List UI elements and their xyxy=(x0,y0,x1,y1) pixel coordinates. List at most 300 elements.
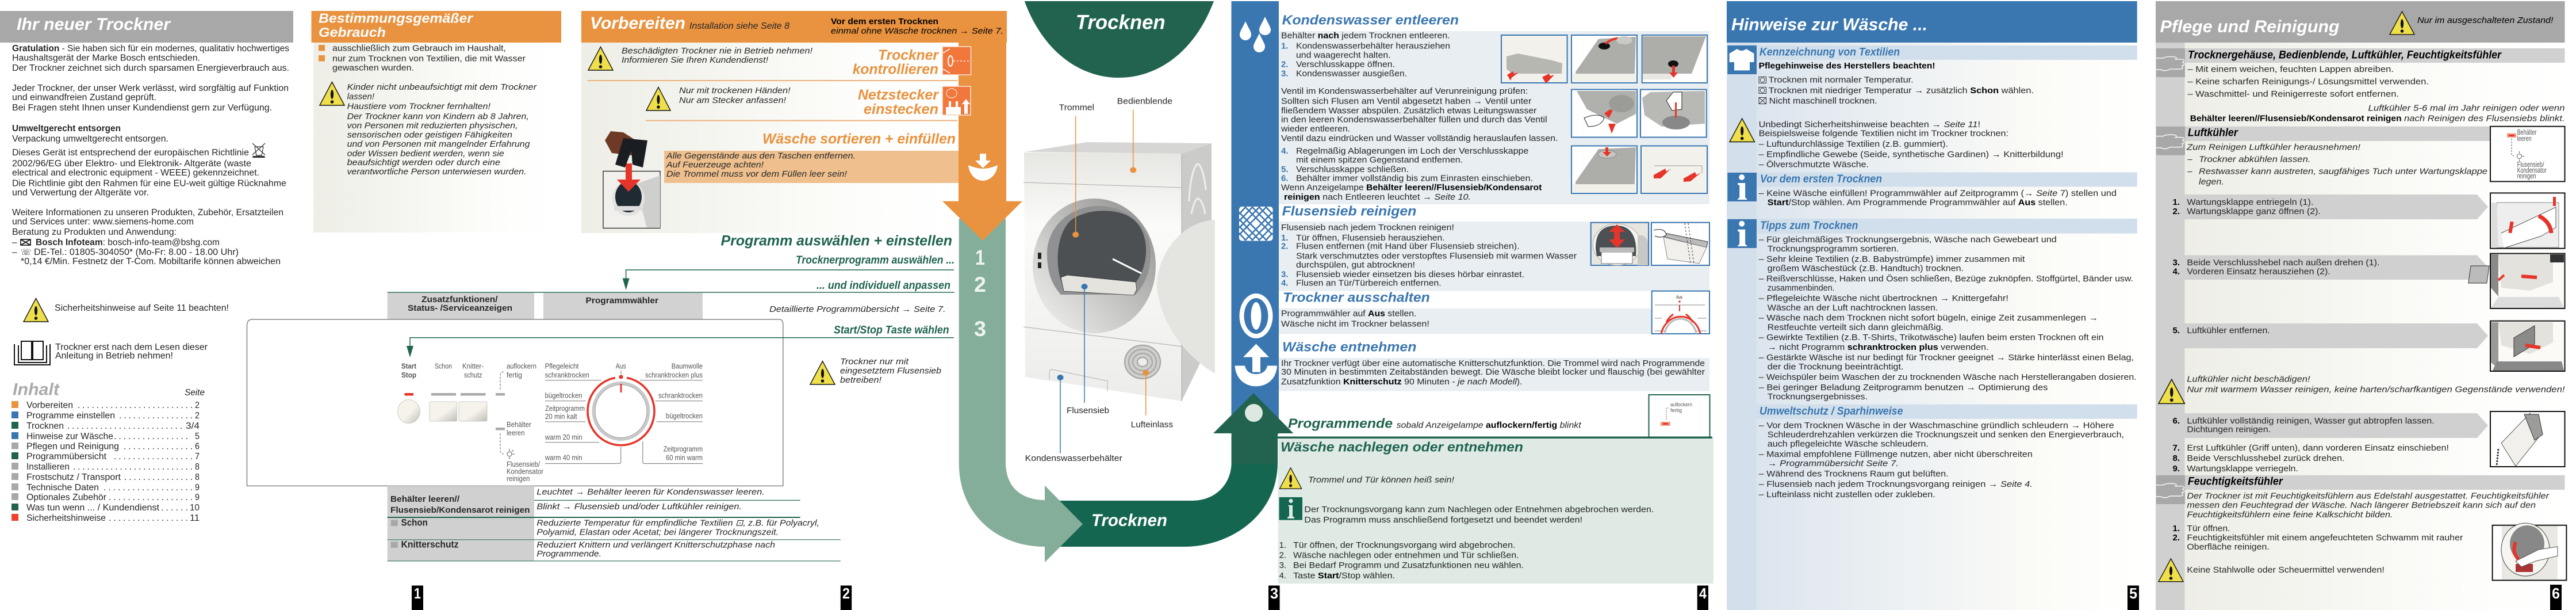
warning: unsuitable textiles: Beispielsweise folgende Textilien nicht im Trockner trocknen: xyxy=(1759,129,2008,139)
bullet list: ausschließlich zum Gebrauch im Haushalt, xyxy=(332,44,506,54)
icon: unload laundry xyxy=(1235,344,1277,386)
dial labels: Zeitprogramm xyxy=(664,445,703,453)
function table: Leuchtet → Behälter leeren für Kondenswasser leeren. xyxy=(536,487,765,497)
warning hot drum xyxy=(1279,468,1455,489)
warning: lint filter: betreiben! xyxy=(840,375,882,385)
function labels: Behälter xyxy=(507,421,531,429)
steps: und waagerecht halten. xyxy=(1296,51,1391,60)
panel: Vorbereiten xyxy=(581,11,1007,233)
warning: damaged dryer xyxy=(588,46,813,70)
note: first drying: einmal ohne Wäsche trocknen → Seite 7. xyxy=(831,26,1003,36)
section: Tipps zum Trocknen: – Gestärkte Wäsche ist nur bedingt für Trockner geeignet → Stärke hinterlässt einen Belag, xyxy=(1759,353,2134,363)
step bar 1-2: Wartungsklappe ganz öffnen (2). xyxy=(2187,207,2321,216)
step bar 1-2: 1. xyxy=(2172,197,2180,207)
section: Vor dem ersten Trocknen: – Keine Wäsche einfüllen! Programmwähler auf Zeitprogramm (→ Seite 7) stellen und xyxy=(1759,188,2117,198)
warning: unsuitable textiles: Unbedingt Sicherheitshinweise beachten → Seite 11 ! xyxy=(1759,120,1980,129)
heading: Trocknen top: Trocknen xyxy=(1076,12,1166,34)
warning text: Der Trockner kann von Kindern ab 8 Jahren, xyxy=(347,112,529,121)
table of contents: Frostschutz / Transport xyxy=(26,472,121,482)
steps: Verschlusskappe schließen. xyxy=(1296,165,1409,174)
sub heading: Installation siehe Seite 8 xyxy=(689,21,789,31)
heading band xyxy=(581,11,1007,43)
table of contents: . . . . . . . . . . . . . . . . xyxy=(114,432,188,441)
step bar 3-4 xyxy=(2156,256,2488,280)
callouts: Kondenswasserbehälter xyxy=(1025,453,1122,463)
warning: do not damage: Nur mit warmem Wasser reinigen, keine harten/scharfkantigen Gegenstände verwenden! xyxy=(2187,384,2565,395)
step bar 1-2 xyxy=(2156,195,2488,219)
table of contents: . . . . . . . . . . . . . . . . . . . . . . . . . . xyxy=(73,462,193,472)
care symbols xyxy=(1759,77,1766,104)
section: Tipps zum Trocknen: zusammenbinden. xyxy=(1768,283,1834,293)
text block: contact: *0,14 €/Min. Festnetz der T-Com. Mobiltarife können abweichen xyxy=(21,257,281,266)
section: Tipps zum Trocknen: → nicht Programm schranktrocken plus verwenden. xyxy=(1768,342,1989,352)
steps: 1. xyxy=(1281,41,1289,51)
text block: Umweltgerecht entsorgen: und Verwertung der Altgeräte vor. xyxy=(12,188,149,197)
illustration: service flap 1 xyxy=(2468,253,2564,308)
air vent xyxy=(1125,345,1160,379)
table of contents: . . . . . . . . . . . . . . . . xyxy=(119,411,193,421)
section: Luftkühler: – xyxy=(2187,155,2192,165)
column header: Zusatzfunktionen xyxy=(388,293,534,319)
steps xyxy=(1279,540,1524,581)
warning: lint filter xyxy=(810,357,941,385)
door xyxy=(1157,220,1215,373)
function table: Knitterschutz xyxy=(401,540,459,550)
warning: no steel wool: Keine Stahlwolle oder Scheuermittel verwenden! xyxy=(2187,565,2385,575)
page number 6 xyxy=(2550,585,2562,610)
section: Feuchtigkeitsfühler xyxy=(2156,475,2564,552)
icon: hand xyxy=(2156,475,2185,504)
steps: Behälter immer vollständig bis zum Einrasten einschieben. xyxy=(1296,174,1533,184)
text block: contact: und Services unter: www.siemens-home.com xyxy=(12,217,194,227)
section: Vor dem ersten Trocknen xyxy=(1727,173,2137,208)
table of contents: Trocknen xyxy=(26,421,64,431)
page number 3 xyxy=(1268,585,1280,610)
function table: Programmende. xyxy=(536,549,601,559)
icon: load laundry xyxy=(968,154,998,181)
info note: Das Programm muss anschließend fortgesetzt und beendet werden! xyxy=(1304,515,1582,525)
steps: in den leeren Kondenswasserbehälter füllen und durch das Ventil xyxy=(1281,115,1547,125)
section: Tipps zum Trocknen: – Reißverschlüsse, Haken und Ösen schließen, Bezüge zuknöpfen. Stoffgürtel, Bänder usw. xyxy=(1759,273,2133,284)
function labels: Kondensator xyxy=(507,467,543,475)
text xyxy=(1281,309,1429,329)
note: first drying xyxy=(831,17,1003,36)
text: Zusatzfunktion Knitterschutz 90 Minuten - je nach Modell ). xyxy=(1281,377,1523,387)
steps: Wenn Anzeigelampe Behälter leeren//Flusensieb/Kondensarot xyxy=(1281,183,1542,193)
section: Feuchtigkeitsfühler: messen den Feuchtegrad der Wäsche. Nach längerer Betriebszeit kann sich auf den xyxy=(2187,501,2536,510)
table of contents: Vorbereiten xyxy=(26,401,73,410)
safety note: Sicherheitshinweise auf Seite 11 beachten! xyxy=(55,303,229,313)
panel background xyxy=(581,43,958,233)
steps: Regelmäßig Ablagerungen im Loch der Verschlusskappe xyxy=(1296,146,1528,156)
page number 4 xyxy=(1697,585,1708,610)
step bar 3-4: Beide Verschlusshebel nach außen drehen (1). xyxy=(2187,258,2379,268)
tank handle xyxy=(1049,369,1107,391)
steps: Flusen entfernen (mit Hand über Flusensieb streichen). xyxy=(1296,242,1519,251)
program end illustration: auflockern xyxy=(1670,402,1692,408)
table of contents: 9 xyxy=(195,493,200,502)
icon: switch off xyxy=(1240,293,1273,338)
table of contents: . . . . . . . . . . . . . . . . . . . xyxy=(103,483,193,493)
icon: water drops xyxy=(1240,17,1271,52)
section: Tipps zum Trocknen: – Bei geringer Beladung Zeitprogramm benutzen → Optimierung des xyxy=(1759,383,2048,392)
section: Tipps zum Trocknen: Restfeuchte verteilt sich dann gleichmäßig. xyxy=(1768,322,1943,332)
section: Luftkühler: – xyxy=(2187,167,2192,177)
column header: Programmwähler xyxy=(543,293,703,319)
heading: Bestimmungsgemäßer xyxy=(319,10,473,25)
section: Tipps zum Trocknen: – Für gleichmäßiges Trocknungsergebnis, Wäsche nach Gewebeart und xyxy=(1759,235,2057,245)
panel: Flusensieb reinigen xyxy=(1281,204,1709,288)
note box: pockets: Auf Feuerzeuge achten! xyxy=(666,160,764,170)
table of contents: 8 xyxy=(195,472,200,482)
note box: pockets: Alle Gegenstände aus den Taschen entfernen. xyxy=(666,151,856,161)
table of contents: . . . . . . . . . . . . . . . xyxy=(124,472,193,482)
warning: dry hands xyxy=(646,86,791,110)
illustration: dryer xyxy=(1023,97,1215,463)
text block: contact: DE-Tel.: 01805-304050* (Mo-Fr: 8.00 - 18.00 Uhr) xyxy=(34,247,239,257)
table of contents: . . . . . . . . . . . . . . . . . . xyxy=(109,493,193,502)
function labels: leeren xyxy=(507,429,525,437)
section: Umweltschutz: – Flusensieb nach jedem Trocknungsvorgang reinigen → Seite 4. xyxy=(1759,479,2033,489)
section: Luftkühler xyxy=(2156,127,2491,186)
text block: Umweltgerecht entsorgen: Umweltgerecht entsorgen xyxy=(12,124,121,134)
section: Feuchtigkeitsfühler: Der Trockner ist mit Feuchtigkeitsfühlern aus Edelstahl ausgestattet. Feuchtigkeitsfühler xyxy=(2187,491,2550,501)
step: Wäsche sortieren: Wäsche sortieren + einfüllen xyxy=(762,131,956,147)
table of contents: 5 xyxy=(195,432,200,441)
steps: fließendem Wasser abspülen. Zusätzlich etwas Leitungswasser xyxy=(1281,106,1536,116)
section: Feuchtigkeitsfühler: Feuchtigkeitsfühler mit einem angefeuchteten Schwamm mit rauher xyxy=(2187,533,2463,543)
heading: Gebrauch xyxy=(319,25,386,40)
dial labels: bügeltrocken xyxy=(545,392,582,400)
steps: Flusensieb nach jedem Trocknen reinigen! xyxy=(1281,223,1454,232)
icon: hand xyxy=(2156,48,2185,77)
text block: intro xyxy=(12,44,289,113)
section: Umweltschutz: Schleuderdrehzahlen verkürzen die Trocknungszeit und senken den Energieverbrauch, xyxy=(1768,430,2124,440)
section: Tipps zum Trocknen: der die Trocknung beeinträchtigt. xyxy=(1768,362,1903,372)
dryer front xyxy=(1024,152,1182,401)
illustration 7: push tank in xyxy=(1641,146,1707,193)
dashed connectors xyxy=(500,372,504,454)
steps: Bei Bedarf Programm und Zusatzfunktionen neu wählen. xyxy=(1293,561,1524,570)
section: Tipps zum Trocknen: – Gewirkte Textilien (z.B. T-Shirts, Trikotwäsche) laufen beim ersten Trocknen oft ein xyxy=(1759,333,2104,342)
text block: Umweltgerecht entsorgen: 2002/96/EG über Elektro- und Elektronik- Altgeräte (waste xyxy=(12,159,251,169)
dial labels: Pflegeleicht xyxy=(545,363,579,371)
function labels: fertig xyxy=(507,371,522,379)
title: Ihr neuer Trockner xyxy=(17,15,171,34)
heading band xyxy=(0,11,293,43)
page number 5 xyxy=(2128,585,2139,610)
warning text: beaufsichtigt werden oder durch eine xyxy=(347,158,500,167)
program end illustration: fertig xyxy=(1670,407,1682,414)
table of contents: Installieren xyxy=(26,462,70,472)
function table xyxy=(388,486,841,562)
program dial xyxy=(588,371,654,445)
steps: Kondenswasser ausgießen. xyxy=(1296,69,1407,78)
top rule xyxy=(1278,436,1712,439)
steps: Flusen an Tür/Türbereich entfernen. xyxy=(1296,279,1442,288)
warning: unsuitable textiles: – Ölverschmutzte Wäsche. xyxy=(1759,159,1869,170)
steps: Stark verschmutztes oder verstopftes Flusensieb mit warmen Wasser xyxy=(1296,251,1577,261)
steps: 3. xyxy=(1281,69,1289,78)
illustration 6: close cap xyxy=(1571,146,1637,193)
orange flow arrow xyxy=(942,42,1022,241)
panel background xyxy=(313,43,557,232)
step: Netzstecker einstecken xyxy=(858,87,939,117)
table of contents: 2 xyxy=(195,401,200,410)
heading band xyxy=(312,11,561,43)
label: Seite: Seite xyxy=(185,388,205,398)
steps 7-9 xyxy=(2172,443,2449,474)
step bar 3-4: 4. xyxy=(2172,267,2180,277)
steps: 6. xyxy=(1281,174,1289,184)
section: Feuchtigkeitsfühler: Oberfläche reinigen. xyxy=(2187,542,2270,552)
steps 7-9: 9. xyxy=(2172,464,2180,474)
warning: unsuitable textiles: – Empfindliche Gewebe (Seide, synthetische Gardinen) → Knitterbildung! xyxy=(1759,150,2064,159)
section: Luftkühler: Trockner abkühlen lassen. xyxy=(2199,155,2310,165)
steps: Sollten sich Flusen am Ventil abgesetzt haben → Ventil unter xyxy=(1281,97,1531,106)
function table: Polyamid, Elastan oder Acetat; bei längerer Trocknungszeit. xyxy=(536,528,779,537)
table of contents: 11 xyxy=(190,513,200,523)
table of contents: 7 xyxy=(195,452,200,462)
section: Umweltschutz: Umweltschutz / Sparhinweise xyxy=(1759,405,1903,417)
section: Umweltschutz: – Vor dem Trocknen Wäsche in der Waschmaschine gründlich schleudern → Höhere xyxy=(1759,421,2114,430)
section: Tipps zum Trocknen: Wäsche an der Luft nachtrocknen lassen. xyxy=(1768,303,1938,313)
step bar 6: Luftkühler vollständig reinigen, Wasser gut abtropfen lassen. xyxy=(2187,416,2435,426)
reading note: Anleitung in Betrieb nehmen! xyxy=(55,351,173,361)
text block: Umweltgerecht entsorgen: Die Richtlinie gibt den Rahmen für eine EU-weit gültige Rücknahme xyxy=(12,178,286,189)
buttons xyxy=(398,399,487,424)
callouts: Flusensieb xyxy=(1067,406,1109,415)
section: Tipps zum Trocknen: – Weichspüler beim Waschen der zu trocknenden Wäsche nach Herstellerangaben dosieren. xyxy=(1759,372,2137,382)
section: Umweltschutz: – Während des Trocknens Raum gut belüften. xyxy=(1759,469,1949,479)
steps: Flusensieb wieder einsetzen bis dieses hörbar einrastet. xyxy=(1296,270,1524,280)
function table: Flusensieb/Kondensarot reinigen xyxy=(390,505,530,515)
section: Gehäuse: – Keine scharfen Reinigungs-/ Lösungsmittel verwenden. xyxy=(2187,77,2429,87)
steps: 4. xyxy=(1279,571,1286,581)
text: Ihr Trockner verfügt über eine automatische Knitterschutzfunktion. Die Trommel wird nach Programmende xyxy=(1281,359,1705,368)
step numbers: 3 xyxy=(974,317,986,341)
icon: lint lamp xyxy=(507,449,515,459)
section: Gehäuse: Behälter leeren//Flusensieb/Kondensarot reinigen xyxy=(2190,114,2402,124)
section: Kennzeichnung xyxy=(1727,45,2137,106)
steps 7-9: 7. xyxy=(2172,443,2180,453)
warning text: und von Personen mit mangelnder Erfahrung xyxy=(347,139,530,149)
column header: Zusatzfunktionen: Zusatzfunktionen/ xyxy=(421,295,498,304)
warning: do not damage xyxy=(2159,374,2565,403)
icon: open book xyxy=(14,341,50,365)
heading: Programmende: Programmende xyxy=(1288,416,1393,431)
section: Tipps zum Trocknen: – Pflegeleichte Wäsche nicht übertrocknen → Knittergefahr! xyxy=(1759,293,2008,303)
note box: pockets: Die Trommel muss vor dem Füllen leer sein! xyxy=(666,169,848,179)
dial labels xyxy=(545,363,703,462)
warning text: von Personen mit reduzierten physischen, xyxy=(347,121,518,131)
arrow: start stop xyxy=(407,338,954,357)
blue side strip xyxy=(1232,1,1279,434)
column header: Programmwähler: Programmwähler xyxy=(585,296,658,306)
icon: hand xyxy=(2156,127,2185,155)
page number 5: 5 xyxy=(2129,585,2137,602)
table of contents: Pflegen und Reinigung xyxy=(26,442,119,451)
heading band xyxy=(2156,1,2564,43)
warning: dry hands: Nur mit trockenen Händen! xyxy=(679,86,791,96)
function table: Blinkt → Flusensieb und/oder Luftkühler reinigen. xyxy=(536,502,742,512)
step bar 3-4: Vorderen Einsatz herausziehen (2). xyxy=(2187,267,2330,277)
section: Umweltschutz: – Lufteinlass nicht zustellen oder zukleben. xyxy=(1759,490,1935,500)
text block: contact: – xyxy=(12,238,17,247)
icon: lint filter lattice xyxy=(1239,207,1273,241)
steps: Tür öffnen, Flusensieb herausziehen. xyxy=(1296,233,1445,243)
icon: t-shirt xyxy=(1730,49,1754,70)
text block: contact: – xyxy=(12,247,17,257)
indicator inset xyxy=(2490,127,2564,181)
steps 7-9: 8. xyxy=(2172,453,2180,463)
icon: warning triangle xyxy=(320,82,344,105)
callouts: Lufteinlass xyxy=(1131,420,1173,429)
steps: 2. xyxy=(1281,242,1289,251)
steps: 1. xyxy=(1281,233,1289,243)
section: Vor dem ersten Trocknen: Start/Stop wählen. Am Programmende Programmwähler auf Aus stellen. xyxy=(1768,198,2068,208)
step bar 6: 6. xyxy=(2172,416,2180,426)
function labels: Stop xyxy=(401,371,416,379)
panel: Wäsche nachlegen oder entnehmen xyxy=(1278,395,1713,584)
warning hot drum: Trommel und Tür können heiß sein! xyxy=(1308,475,1455,485)
steps: Tür öffnen, der Trocknungsvorgang wird abgebrochen. xyxy=(1293,540,1516,550)
illustration 10: dial off xyxy=(1652,291,1709,334)
function table: Behälter leeren// xyxy=(390,494,460,504)
section: Kennzeichnung: Kennzeichnung von Textilien xyxy=(1759,46,1900,58)
warning: lint filter: Trockner nur mit xyxy=(840,357,909,367)
steps: 1. xyxy=(1279,540,1286,550)
sub text: sobald Anzeigelampe auflockern/fertig blinkt xyxy=(1397,421,1581,430)
step: Trockner kontrollieren: Trockner xyxy=(878,47,939,63)
subheading: ... und individuell anpassen xyxy=(816,280,950,292)
step bar 1-2: 2. xyxy=(2172,207,2180,216)
step bar 1-2: Wartungsklappe entriegeln (1). xyxy=(2187,197,2313,207)
section: Gehäuse xyxy=(2156,48,2564,124)
warning: damaged dryer: Informieren Sie Ihren Kundendienst! xyxy=(622,55,769,65)
table of contents: Sicherheitshinweise xyxy=(26,513,106,523)
warning: unsuitable textiles xyxy=(1730,119,2064,170)
warning text: oder Wissen bedient werden, wenn sie xyxy=(347,148,504,159)
section: Gehäuse: Trocknergehäuse, Bedienblende, Luftkühler, Feuchtigkeitsfühler xyxy=(2188,49,2502,61)
section: Luftkühler: Restwasser kann austreten, saugfähiges Tuch unter Wartungsklappe xyxy=(2199,167,2487,177)
page number 4: 4 xyxy=(1699,585,1707,602)
section: Tipps zum Trocknen: – Wäsche nach dem Trocknen nicht sofort bügeln, einige Zeit zusammenlegen → xyxy=(1759,313,2098,323)
section: Kennzeichnung: Trocknen mit normaler Temperatur. xyxy=(1769,75,1914,85)
table of contents: 8 xyxy=(195,462,200,472)
section: Feuchtigkeitsfühler: Feuchtigkeitsfühler xyxy=(2188,476,2283,488)
function labels xyxy=(401,363,543,483)
section: Tipps zum Trocknen: – Sehr kleine Textilien (z.B. Babystrümpfe) immer zusammen mit xyxy=(1759,254,2025,264)
step numbers xyxy=(974,246,986,341)
icon: inspect dryer xyxy=(942,47,971,75)
note: first drying: Vor dem ersten Trocknen xyxy=(831,17,938,26)
panel: Pflege und Reinigung xyxy=(2156,1,2566,610)
text: Wäsche nicht im Trockner belassen! xyxy=(1281,319,1429,329)
drum xyxy=(1047,206,1151,295)
warning text: verantwortliche Person unterwiesen wurden. xyxy=(347,167,527,177)
text block: intro: Der Trockner zeichnet sich durch sparsamen Energieverbrauch aus. xyxy=(12,63,289,73)
heading: Inhalt: Inhalt xyxy=(13,380,60,399)
subheading: Trocknerprogramm auswählen ... xyxy=(796,254,954,266)
section: Gehäuse: – Waschmittel- und Reinigerreste sofort entfernen. xyxy=(2187,89,2399,99)
step bar 6 xyxy=(2156,413,2488,438)
function labels: Start xyxy=(401,363,417,371)
column header: Zusatzfunktionen: Status- /Serviceanzeigen xyxy=(408,303,512,313)
page number 2: 2 xyxy=(842,585,850,602)
text block: Umweltgerecht entsorgen: Verpackung umweltgerecht entsorgen. xyxy=(12,134,168,144)
section: Umweltschutz xyxy=(1757,405,2137,500)
table of contents: . . . . . . . . . . . . . . . . . xyxy=(114,452,193,462)
icon: arrow dot xyxy=(1245,404,1263,422)
indicator inset: Kondensator xyxy=(2517,166,2547,174)
table of contents: . . . . . . . . . . . . . . . . . . . . . . . . . xyxy=(78,401,193,410)
illustration 4: clean valve xyxy=(1571,90,1637,137)
indicator inset: Flusensieb/ xyxy=(2517,161,2544,169)
heading: Trockner ausschalten xyxy=(1283,290,1430,305)
panel background xyxy=(1278,437,1713,584)
illustration 5: press valve xyxy=(1640,90,1707,137)
section: Tipps zum Trocknen: Trocknungsergebnisses. xyxy=(1768,392,1868,402)
text: 30 Minuten in bestimmten Zeitabständen bewegt. Die Wäsche bleibt locker und flauschig (bei gewählter xyxy=(1281,367,1705,377)
section: Umweltschutz: auch pflegeleichte Wäsche schleudern. xyxy=(1768,439,1929,449)
program overview link: Detaillierte Programmübersicht → Seite 7. xyxy=(769,304,946,314)
steps: 2. xyxy=(1279,550,1286,561)
steps 7-9: Beide Verschlusshebel zurück drehen. xyxy=(2187,453,2345,463)
dark green return band xyxy=(1045,437,1278,547)
note box: pockets xyxy=(664,151,959,183)
warning: switched off: Nur im ausgeschalteten Zustand! xyxy=(2417,16,2554,25)
icon: info xyxy=(1727,173,1757,201)
dial labels: 20 min kalt xyxy=(545,413,577,421)
steps: 3. xyxy=(1281,270,1289,280)
function labels: auflockern xyxy=(507,363,536,371)
heading: Hinweise zur Wäsche ... xyxy=(1731,15,1927,34)
door ring xyxy=(1033,199,1156,333)
heading xyxy=(319,10,473,40)
dial labels: schranktrocken xyxy=(658,392,703,400)
steps: durchspülen, gut abtrocknen! xyxy=(1296,260,1415,270)
warning text: Kinder nicht unbeaufsichtigt mit dem Trockner xyxy=(347,82,537,92)
text block: intro: und einwandfreien Zustand geprüft. xyxy=(12,93,156,102)
section: Tipps zum Trocknen xyxy=(1727,219,2137,402)
reading note xyxy=(55,342,208,361)
step bar 5 xyxy=(2156,323,2488,348)
step: Netzstecker einstecken: Netzstecker xyxy=(858,87,939,103)
function labels: reinigen xyxy=(507,475,530,483)
table of contents: . . . . . . . . . . . . . . . xyxy=(124,442,193,451)
text block: contact: Weitere Informationen zu unseren Produkten, Zubehör, Ersatzteilen xyxy=(12,208,283,218)
step numbers: 2 xyxy=(974,273,986,296)
latch xyxy=(1038,253,1041,268)
section: Feuchtigkeitsfühler: Tür öffnen. xyxy=(2187,524,2230,533)
light green flow band xyxy=(959,219,1083,562)
dial labels: 60 min warm xyxy=(666,453,703,462)
section: Feuchtigkeitsfühler: 1. xyxy=(2172,524,2180,533)
table of contents: 10 xyxy=(190,503,200,513)
bullet list: gewaschen wurden. xyxy=(332,63,414,73)
warning text xyxy=(347,82,537,177)
text block: intro: Haushaltsgerät der Marke Bosch entschieden. xyxy=(12,53,200,63)
panel background xyxy=(2185,43,2564,610)
dial labels: Baumwolle xyxy=(672,363,703,371)
table of contents: . . . . . . . . . . . . . . . . . xyxy=(109,513,188,523)
step bar 5: Luftkühler entfernen. xyxy=(2187,326,2270,336)
dial labels: schranktrocken plus xyxy=(645,371,703,379)
heading: Wäsche entnehmen xyxy=(1282,340,1416,354)
section: Tipps zum Trocknen: großem Wäschestück (z.B. Handtuch) trocknen. xyxy=(1768,264,1964,273)
text: Programmwähler auf Aus stellen. xyxy=(1281,309,1416,319)
